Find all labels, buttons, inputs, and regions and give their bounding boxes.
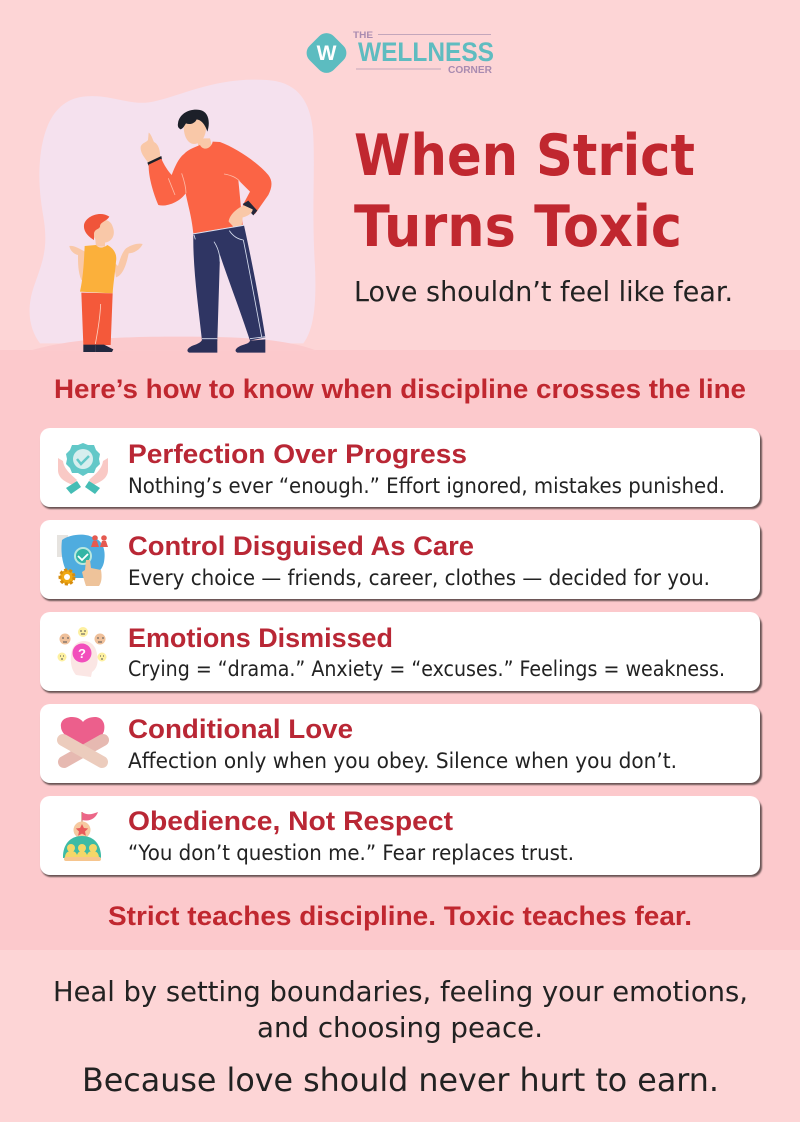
- text: perfection over progress: [128, 439, 725, 498]
- text: control disguised as care: [128, 531, 710, 590]
- closing text: healing advice: and choosing peace.: [257, 1011, 543, 1044]
- logo: The Wellness Corner: WELLNESS: [358, 37, 494, 67]
- text: emotions dismissed: Crying = “drama.” Anxiety = “excuses.” Feelings = weakness.: [128, 657, 725, 681]
- text: obedience not respect: Obedience, Not Respect: [128, 806, 453, 836]
- logo: The Wellness Corner: W: [317, 42, 337, 65]
- panel: perfection over progress: [40, 428, 762, 509]
- panel: control disguised as care: [40, 520, 762, 601]
- icon: badge with hands: [58, 443, 108, 494]
- icon: flag, star and followers: [63, 812, 101, 861]
- icon: emotion faces and head: ?: [78, 646, 86, 661]
- text: perfection over progress: Perfection Over Progress: [128, 439, 467, 469]
- ground: [30, 337, 317, 351]
- title: When Strict: [354, 123, 695, 189]
- title: [354, 123, 695, 260]
- tagline: Love shouldn’t feel like fear.: [354, 275, 733, 308]
- logo: The Wellness Corner: [302, 29, 494, 77]
- panel: conditional love: [40, 704, 762, 785]
- text: conditional love: Conditional Love: [128, 714, 353, 744]
- callout: strict vs toxic: Strict teaches discipline. Toxic teaches fear.: [108, 901, 692, 931]
- text: conditional love: [128, 714, 677, 773]
- illustration: strict father scolding child: [30, 80, 317, 353]
- closing text: healing advice: [53, 975, 748, 1044]
- closing line: Because love should never hurt to earn.: [82, 1061, 719, 1099]
- logo: The Wellness Corner: CORNER: [448, 65, 493, 76]
- section heading: Here’s how to know when discipline crosses the line: [54, 374, 746, 404]
- panel: emotions dismissed: [40, 612, 762, 693]
- text: emotions dismissed: [128, 623, 725, 681]
- text: control disguised as care: Control Disguised As Care: [128, 531, 474, 561]
- text: control disguised as care: Every choice — friends, career, clothes — decided for you.: [128, 566, 710, 590]
- text: emotions dismissed: Emotions Dismissed: [128, 623, 393, 653]
- logo: The Wellness Corner: THE: [353, 30, 373, 41]
- icon: emotion faces and head: [58, 627, 106, 677]
- man: [141, 110, 271, 353]
- icon: heart with crossed arms: [61, 717, 104, 762]
- text: obedience not respect: “You don’t question me.” Fear replaces trust.: [128, 841, 574, 865]
- closing text: healing advice: Heal by setting boundaries, feeling your emotions,: [53, 975, 748, 1008]
- text: obedience not respect: [128, 806, 574, 865]
- band: main content background: [0, 350, 800, 950]
- title: Turns Toxic: [354, 194, 682, 260]
- text: perfection over progress: Nothing’s ever “enough.” Effort ignored, mistakes punished.: [128, 474, 725, 498]
- panel: obedience not respect: [40, 796, 762, 877]
- background blob: [30, 80, 315, 343]
- text: conditional love: Affection only when you obey. Silence when you don’t.: [128, 749, 677, 773]
- child: [69, 214, 143, 352]
- icon: control hand and gear: [57, 535, 108, 586]
